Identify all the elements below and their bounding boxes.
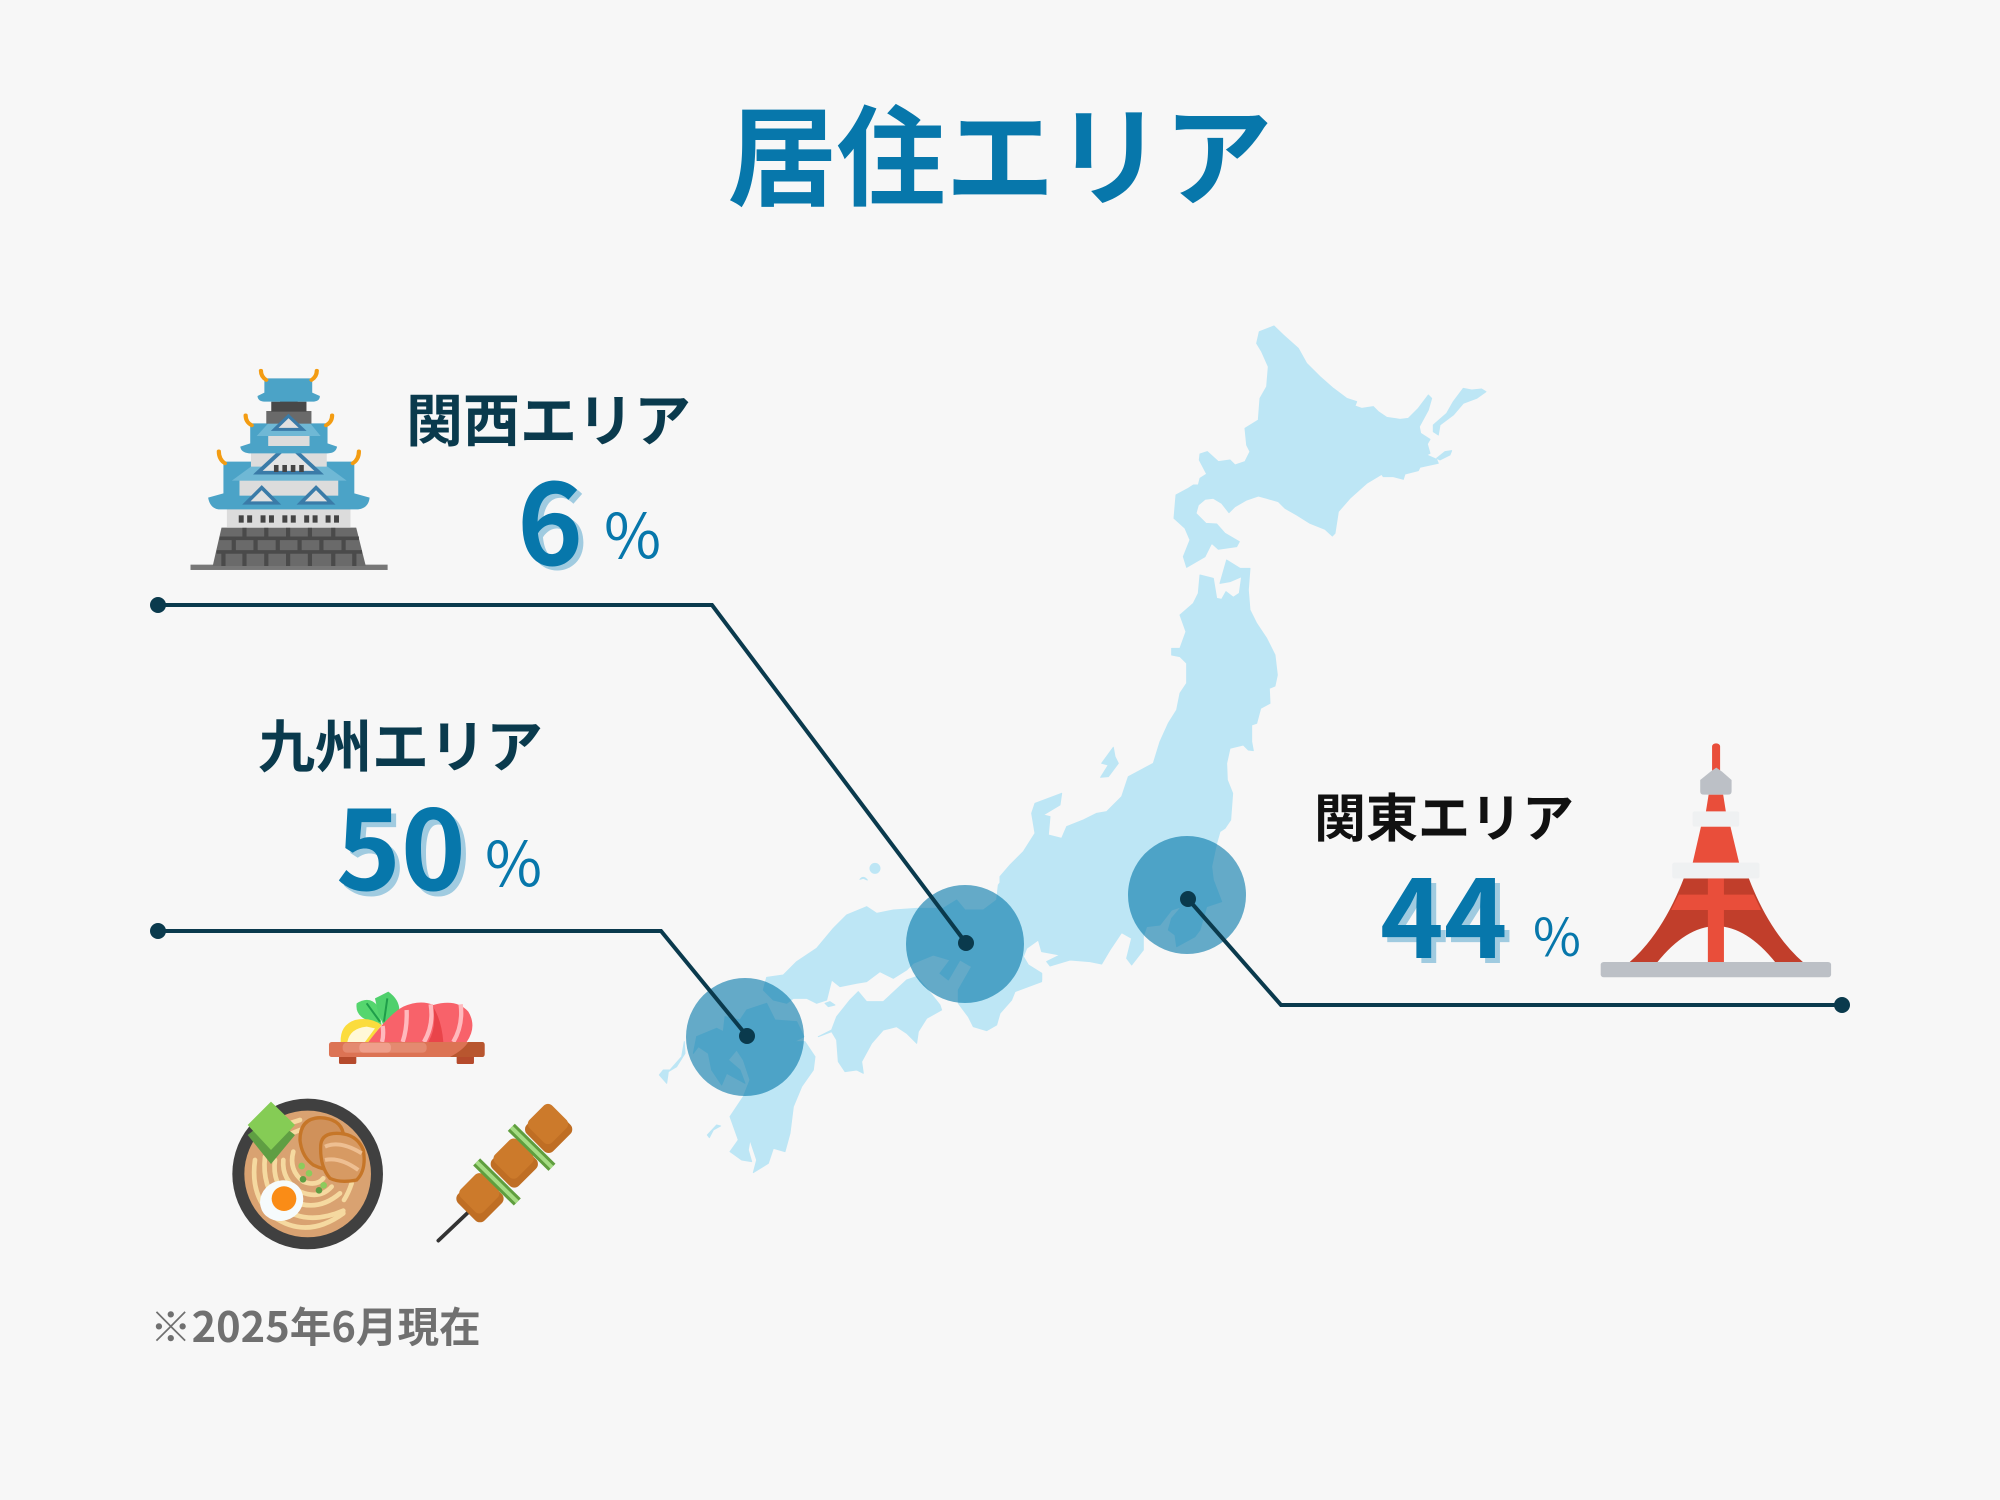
label: Kyushu: 九州エリア bbox=[258, 702, 543, 784]
value: Kansai 6%: % bbox=[604, 486, 661, 576]
marker circle: Kansai bbox=[906, 885, 1024, 1003]
value: Kyushu 50%: 50 bbox=[341, 767, 471, 927]
value: Kanto 44%: 44 bbox=[1380, 834, 1507, 990]
map: Kyushu bbox=[693, 1003, 815, 1173]
label: Kansai: 関西エリア bbox=[406, 376, 691, 458]
icon: sashimi plate bbox=[329, 992, 485, 1064]
map: Goto islands bbox=[659, 1042, 685, 1083]
footnote: ※2025年6月現在 bbox=[150, 1294, 481, 1354]
value: Kyushu 50% bbox=[336, 762, 542, 927]
leader line: Kyushu bbox=[150, 923, 755, 1044]
icon: Tokyo tower bbox=[1601, 743, 1831, 977]
icon: Osaka castle bbox=[191, 371, 388, 570]
marker circle: Kyushu bbox=[686, 978, 804, 1096]
value: Kansai 6%: 6 bbox=[522, 440, 588, 602]
map: Awaji island bbox=[825, 1002, 835, 1007]
label: Kanto: 関東エリア bbox=[1314, 777, 1574, 852]
map: Oki islands bbox=[860, 863, 880, 880]
map: Hokkaido bbox=[1174, 326, 1486, 567]
map of Japan bbox=[659, 326, 1486, 1173]
icon: yakitori skewer bbox=[438, 1101, 575, 1241]
value: Kansai 6%: 6 bbox=[517, 436, 583, 598]
map: western Japan bbox=[659, 860, 1042, 1173]
title: 居住エリア bbox=[728, 72, 1272, 229]
map: Koshiki islands bbox=[707, 1125, 721, 1138]
marker circle: Kanto bbox=[1128, 836, 1246, 954]
value: Kanto 44% bbox=[1380, 834, 1581, 995]
icon: ramen bowl bbox=[232, 1099, 383, 1249]
value: Kansai 6% bbox=[517, 436, 661, 602]
map: Shikoku bbox=[818, 977, 942, 1073]
value: Kyushu 50%: % bbox=[485, 814, 542, 904]
leader line: Kansai bbox=[150, 597, 974, 951]
value: Kyushu 50%: 50 bbox=[336, 762, 466, 922]
leader line: Kanto bbox=[1180, 891, 1850, 1013]
value: Kanto 44%: 44 bbox=[1385, 839, 1512, 995]
value: Kanto 44%: % bbox=[1533, 896, 1581, 971]
map: western Honshu bbox=[763, 860, 1042, 1031]
map: northern and central Honshu bbox=[1000, 560, 1277, 980]
